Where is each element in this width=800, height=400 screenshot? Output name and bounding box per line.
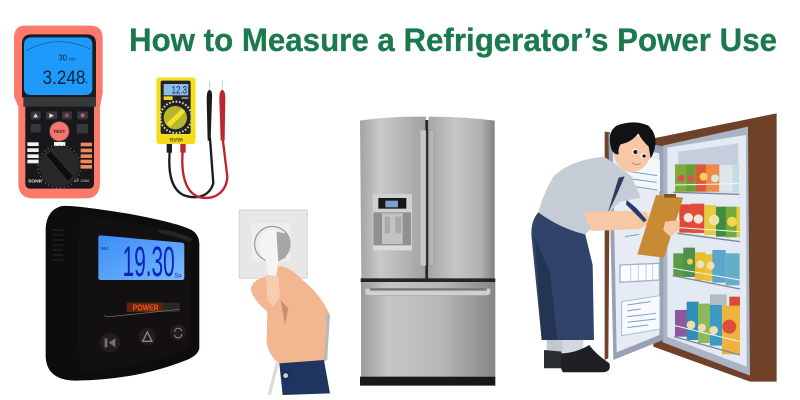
meter dial — [38, 145, 81, 188]
freezer drawer — [361, 282, 495, 377]
meter display: % — [85, 81, 89, 85]
power meter buttons — [100, 324, 186, 353]
shirt cuff — [279, 360, 330, 395]
power label — [127, 303, 180, 313]
man: head — [610, 122, 656, 172]
meter buttons: TEST — [53, 129, 65, 134]
man: shoes — [544, 335, 610, 372]
icon: stainless steel French-door refrigerator — [360, 117, 495, 386]
meter display: 30 — [58, 52, 67, 62]
man: shirt — [538, 157, 641, 234]
probes — [207, 81, 225, 141]
shelf: bottom row cartons — [674, 294, 740, 355]
power meter display — [98, 235, 184, 286]
wall socket — [239, 210, 307, 278]
fridge cabinet — [653, 113, 777, 382]
meter display — [24, 37, 92, 95]
icon: insulation tester meter — [14, 26, 103, 198]
meter display: mA — [69, 56, 76, 61]
multimeter display: 12.3 — [172, 85, 187, 97]
icon: black power meter — [46, 206, 199, 381]
icon: yellow digital multimeter with probes — [156, 77, 227, 198]
shelf: second row drinks — [677, 204, 740, 242]
multimeter dial — [160, 102, 192, 133]
base — [360, 377, 495, 386]
door handles — [420, 130, 435, 266]
open door — [605, 132, 663, 360]
drawer handle — [365, 288, 491, 296]
meter buttons — [27, 111, 92, 169]
power meter display: Md — [101, 246, 108, 252]
icon: insulation tester meter: SONK — [28, 179, 43, 185]
right door — [429, 117, 495, 278]
man: arm — [583, 211, 651, 231]
icon: hand unplugging wall socket — [239, 210, 330, 395]
power meter display: 19.30 — [123, 238, 175, 286]
meter display: 3.248 — [43, 68, 85, 89]
power cord — [269, 363, 277, 395]
man: trousers — [531, 212, 594, 340]
illustration: man with clipboard at open refrigerator — [531, 113, 777, 382]
hand — [251, 266, 330, 364]
icon: insulation tester meter: AP 2460 — [74, 178, 90, 183]
power label: POWER — [133, 303, 159, 313]
shelf: third row cans — [673, 248, 740, 289]
multimeter body — [156, 77, 196, 144]
icon: yellow digital multimeter with probes: TESTER — [169, 137, 183, 143]
shelf: top drinks — [673, 164, 739, 194]
water dispenser — [373, 194, 412, 251]
power meter display: Sx — [175, 273, 182, 279]
left door — [360, 117, 426, 278]
clipboard — [637, 194, 683, 258]
probe leads — [169, 138, 227, 198]
title: How to Measure a Refrigerator’s Power Use — [129, 22, 777, 58]
